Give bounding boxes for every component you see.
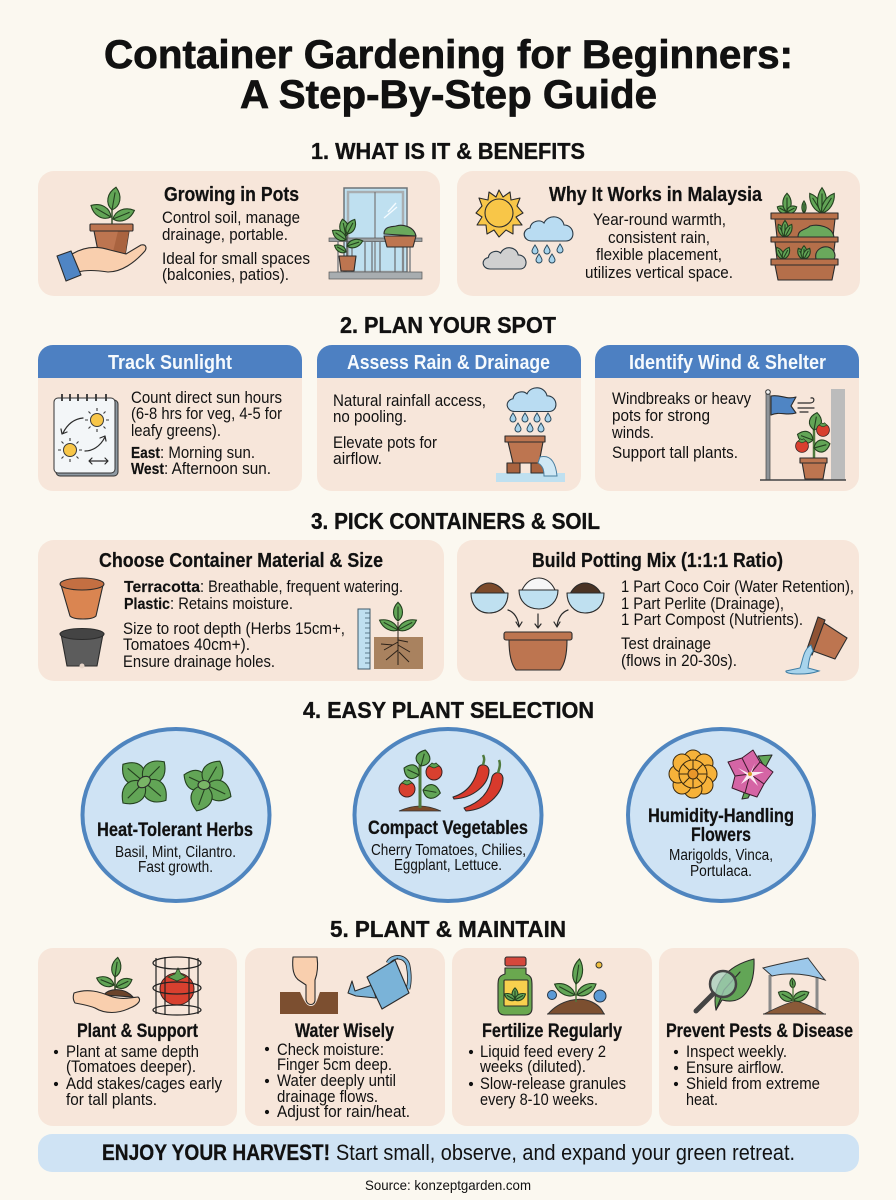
text: herbs: Basil, Mint, Cilantro. xyxy=(115,844,236,861)
text: potting mix: 1 Part Coco Coir (Water Retention), xyxy=(621,578,854,596)
text: vegetables xyxy=(371,842,526,874)
text: identify wind xyxy=(611,390,752,462)
text: potting mix: 1 Part Perlite (Drainage), xyxy=(621,595,784,613)
list: water wisely: Water deeply until xyxy=(277,1072,396,1090)
text: assess rain: airflow. xyxy=(333,450,382,468)
heading: flowers: Flowers xyxy=(691,825,751,846)
text: why it works: flexible placement, xyxy=(596,246,722,264)
list: prevent pests: Shield from extreme xyxy=(686,1075,820,1093)
heading: why it works: Why It Works in Malaysia xyxy=(549,184,763,206)
list: fertilize: Slow-release granules xyxy=(480,1075,626,1093)
text: flowers xyxy=(669,847,773,880)
icon: plastic pot xyxy=(60,628,104,668)
list: water wisely: Adjust for rain/heat. xyxy=(277,1103,410,1121)
panel: compact vegetables xyxy=(354,729,542,901)
icon: three bowls and pot xyxy=(471,578,604,670)
icon: flag, wall and tomato plant xyxy=(760,389,846,480)
list: fertilize xyxy=(469,1043,626,1109)
text: materials: : Breathable, frequent watering. xyxy=(200,578,403,596)
panel: prevent pests and disease xyxy=(659,948,859,1126)
list: plant and support: for tall plants. xyxy=(66,1091,157,1109)
heading: choose container: Choose Container Material & Size xyxy=(99,550,383,572)
text: materials: Tomatoes 40cm+). xyxy=(123,636,250,654)
panel: water wisely xyxy=(245,948,445,1126)
heading: section 1: 1. WHAT IS IT & BENEFITS xyxy=(311,138,585,164)
heading: water wisely: Water Wisely xyxy=(295,1021,394,1042)
text: why it works xyxy=(585,211,733,282)
heading: flowers: Humidity-Handling xyxy=(648,806,794,827)
panel: track sunlight xyxy=(38,345,302,491)
text: flowers: Marigolds, Vinca, xyxy=(669,847,773,864)
list: plant and support: Plant at same depth xyxy=(66,1043,199,1061)
banner: enjoy your harvest: ENJOY YOUR HARVEST! xyxy=(102,1140,330,1165)
icon: rain over elevated pot xyxy=(496,388,565,482)
text: materials: Terracotta xyxy=(124,579,200,596)
heading: assess rain: Assess Rain & Drainage xyxy=(347,352,550,374)
text: assess rain xyxy=(333,392,486,468)
banner: enjoy your harvest: Start small, observe, and expand your green retreat. xyxy=(336,1140,795,1165)
icon: chilies xyxy=(453,755,503,811)
icon: plant with nutrients xyxy=(547,958,606,1014)
text: materials xyxy=(123,578,403,671)
icon: finger in soil xyxy=(280,957,338,1014)
list: prevent pests: Ensure airflow. xyxy=(686,1059,784,1077)
text: growing in pots xyxy=(162,209,310,284)
panel: choose container xyxy=(38,540,444,681)
text: identify wind: winds. xyxy=(611,424,654,442)
text: vegetables: Cherry Tomatoes, Chilies, xyxy=(371,842,526,859)
text: why it works: utilizes vertical space. xyxy=(585,264,733,282)
heading: section 3: 3. PICK CONTAINERS & SOIL xyxy=(311,508,600,534)
icon: balcony with window xyxy=(329,188,422,279)
list: fertilize: every 8-10 weeks. xyxy=(480,1091,598,1109)
title xyxy=(104,33,793,117)
text: growing in pots: Control soil, manage xyxy=(162,209,300,227)
panel: build potting mix xyxy=(457,540,859,681)
text: track sunlight: leafy greens). xyxy=(131,422,221,440)
panel: plant and support xyxy=(38,948,237,1126)
icon: ruler and root depth xyxy=(358,602,423,669)
heading: prevent pests: Prevent Pests & Disease xyxy=(666,1021,853,1042)
panel: why it works in Malaysia xyxy=(457,171,860,296)
heading: section 4: 4. EASY PLANT SELECTION xyxy=(303,697,594,723)
panel: identify wind and shelter xyxy=(595,345,859,491)
icon: marigold xyxy=(669,750,717,798)
text: potting mix: Test drainage xyxy=(621,635,711,653)
heading: fertilize: Fertilize Regularly xyxy=(482,1021,622,1042)
heading: track sunlight: Track Sunlight xyxy=(108,352,232,374)
text: herbs xyxy=(115,844,236,876)
list: fertilize: Liquid feed every 2 xyxy=(480,1043,606,1061)
text: herbs: Fast growth. xyxy=(138,859,213,876)
icon: hand holding potted plant xyxy=(57,186,146,281)
list: water wisely: Check moisture: xyxy=(277,1041,384,1059)
text: growing in pots: (balconies, patios). xyxy=(162,266,289,284)
text: identify wind: Windbreaks or heavy xyxy=(612,390,752,408)
heading: growing in pots: Growing in Pots xyxy=(164,184,299,206)
text: assess rain: no pooling. xyxy=(333,408,407,426)
source line: Source: konzeptgarden.com xyxy=(365,1177,531,1193)
text: flowers: Portulaca. xyxy=(690,863,752,880)
icon: magnifier on leaf xyxy=(696,959,754,1011)
icon: mint xyxy=(180,756,235,814)
icon: tomato plant xyxy=(399,748,442,811)
list: prevent pests: Inspect weekly. xyxy=(686,1043,787,1061)
heading: identify wind: Identify Wind & Shelter xyxy=(629,352,826,374)
icon: basil xyxy=(115,754,173,811)
text: assess rain: Elevate pots for xyxy=(333,434,437,452)
text: potting mix: 1 Part Compost (Nutrients). xyxy=(621,611,803,629)
banner: enjoy your harvest xyxy=(38,1134,859,1172)
list: prevent pests: heat. xyxy=(686,1091,718,1109)
heading: vegetables: Compact Vegetables xyxy=(368,818,528,839)
list: fertilize: weeks (diluted). xyxy=(479,1058,586,1076)
text: vegetables: Eggplant, Lettuce. xyxy=(394,857,502,874)
icon: notebook with suns xyxy=(54,394,118,476)
text: materials: Size to root depth (Herbs 15cm+, xyxy=(123,620,345,638)
panel: growing in pots xyxy=(38,171,440,296)
heading: section 5: 5. PLANT & MAINTAIN xyxy=(330,916,566,942)
icon: seedling in hand xyxy=(73,957,140,1012)
list: plant and support: (Tomatoes deeper). xyxy=(66,1058,196,1076)
icon: vertical planters xyxy=(771,188,838,280)
text: potting mix xyxy=(621,578,854,670)
icon: grey cloud xyxy=(483,248,526,269)
text: track sunlight: : Afternoon sun. xyxy=(164,460,271,478)
icon: vinca xyxy=(728,750,773,799)
icon: tipped pot draining xyxy=(786,617,847,674)
list: plant and support: Add stakes/cages early xyxy=(66,1075,223,1093)
list: prevent pests xyxy=(674,1043,820,1109)
icon: fertilizer bottle xyxy=(498,957,532,1015)
icon: caged tomato xyxy=(153,957,201,1015)
text: track sunlight xyxy=(131,389,282,478)
icon: rain cloud xyxy=(524,217,573,263)
icon: watering can xyxy=(348,957,410,1009)
heading: flowers xyxy=(648,806,794,846)
text: identify wind: Support tall plants. xyxy=(612,444,738,462)
text: track sunlight: West xyxy=(131,461,165,478)
text: growing in pots: drainage, portable. xyxy=(162,226,288,244)
heading: potting mix: Build Potting Mix (1:1:1 Ratio) xyxy=(532,550,783,572)
list: water wisely: Finger 5cm deep. xyxy=(277,1056,392,1074)
text: materials: : Retains moisture. xyxy=(170,595,293,613)
panel: humidity-handling flowers xyxy=(628,729,814,901)
text: materials: Plastic xyxy=(124,596,170,613)
icon: shade cloth over seedling xyxy=(763,958,826,1014)
panel: fertilize regularly xyxy=(452,948,652,1126)
panel: assess rain and drainage xyxy=(317,345,581,491)
text: track sunlight: : Morning sun. xyxy=(160,444,255,462)
list: plant and support xyxy=(54,1043,223,1109)
text: track sunlight: East xyxy=(131,445,161,462)
text: assess rain: Natural rainfall access, xyxy=(333,392,486,410)
list: water wisely xyxy=(265,1041,410,1121)
text: why it works: consistent rain, xyxy=(608,229,710,247)
text: track sunlight: Count direct sun hours xyxy=(131,389,282,407)
text: materials: Ensure drainage holes. xyxy=(123,653,275,671)
text: track sunlight: (6-8 hrs for veg, 4-5 for xyxy=(131,405,282,423)
text: identify wind: pots for strong xyxy=(612,407,710,425)
title: Container Gardening for Beginners: xyxy=(104,33,793,77)
panel: heat-tolerant herbs xyxy=(82,729,270,901)
title: A Step-By-Step Guide xyxy=(240,73,657,117)
text: potting mix: (flows in 20-30s). xyxy=(621,652,737,670)
heading: plant and support: Plant & Support xyxy=(77,1021,199,1042)
heading: herbs: Heat-Tolerant Herbs xyxy=(97,820,253,841)
icon: terracotta pot xyxy=(60,578,104,619)
text: growing in pots: Ideal for small spaces xyxy=(162,250,310,268)
text: why it works: Year-round warmth, xyxy=(593,211,726,229)
list: water wisely: drainage flows. xyxy=(277,1088,378,1106)
heading: section 2: 2. PLAN YOUR SPOT xyxy=(340,312,556,338)
icon: sun xyxy=(476,190,523,237)
